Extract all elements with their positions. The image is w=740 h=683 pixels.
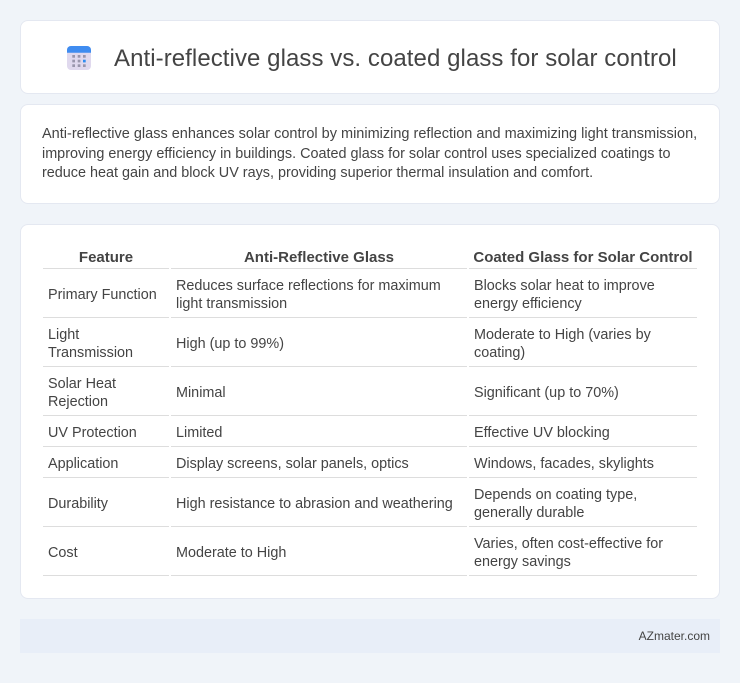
footer bar bbox=[20, 619, 720, 653]
row: solar heat rejection: Significant (up to 70%) bbox=[474, 385, 619, 401]
icon: calendar grid bbox=[67, 46, 91, 70]
title: Anti-reflective glass vs. coated glass for solar control bbox=[114, 45, 677, 72]
row: light transmission: Transmission bbox=[48, 345, 133, 361]
row: durability: generally durable bbox=[474, 505, 584, 521]
row: primary function: Blocks solar heat to improve bbox=[474, 278, 655, 294]
row: application bbox=[43, 456, 697, 478]
row: light transmission: High (up to 99%) bbox=[176, 336, 284, 352]
row: UV protection bbox=[43, 425, 697, 447]
row: application: Application bbox=[48, 456, 118, 472]
row: light transmission bbox=[43, 327, 697, 367]
row: UV protection: UV Protection bbox=[48, 425, 137, 441]
row: cost: Cost bbox=[48, 545, 78, 561]
row: cost: Varies, often cost-effective for bbox=[474, 536, 663, 552]
row: primary function: light transmission bbox=[176, 296, 287, 312]
panel: title card bbox=[20, 20, 720, 94]
footer credit: AZmater.com bbox=[639, 629, 710, 643]
row: cost: energy savings bbox=[474, 554, 571, 570]
row: application: Windows, facades, skylights bbox=[474, 456, 654, 472]
row: durability: High resistance to abrasion and weathering bbox=[176, 496, 453, 512]
row: cost: Moderate to High bbox=[176, 545, 286, 561]
row: solar heat rejection: Solar Heat bbox=[48, 376, 116, 392]
text block: description lines: improving energy efficiency in buildings. Coated glass for solar control uses specialized coatings to bbox=[42, 146, 670, 162]
row: light transmission: coating) bbox=[474, 345, 525, 361]
row: primary function: Reduces surface reflections for maximum bbox=[176, 278, 441, 294]
panel: description bbox=[20, 104, 720, 204]
table header: Anti-Reflective Glass bbox=[244, 249, 394, 266]
row: UV protection: Effective UV blocking bbox=[474, 425, 610, 441]
row: durability: Depends on coating type, bbox=[474, 487, 637, 503]
row: light transmission: Moderate to High (varies by bbox=[474, 327, 651, 343]
row: durability bbox=[43, 487, 697, 527]
table header bbox=[43, 249, 697, 269]
row: UV protection: Limited bbox=[176, 425, 222, 441]
row: primary function: Primary Function bbox=[48, 287, 157, 303]
table header: Coated Glass for Solar Control bbox=[473, 249, 693, 266]
row: cost bbox=[43, 536, 697, 576]
text block: description lines: Anti-reflective glass enhances solar control by minimizing reflection and maximizing light transmission, bbox=[42, 126, 697, 142]
row: solar heat rejection: Rejection bbox=[48, 394, 108, 410]
text block: description lines bbox=[42, 126, 697, 181]
row: light transmission: Light bbox=[48, 327, 79, 343]
row: durability: Durability bbox=[48, 496, 108, 512]
row: primary function bbox=[43, 278, 697, 318]
row: application: Display screens, solar panels, optics bbox=[176, 456, 409, 472]
table header: Feature bbox=[79, 249, 133, 266]
panel: comparison table bbox=[20, 224, 720, 599]
text block: description lines: reduce heat gain and block UV rays, providing superior thermal insulation and comfort. bbox=[42, 165, 593, 181]
row: solar heat rejection: Minimal bbox=[176, 385, 226, 401]
row: solar heat rejection bbox=[43, 376, 697, 416]
row: primary function: energy efficiency bbox=[474, 296, 582, 312]
